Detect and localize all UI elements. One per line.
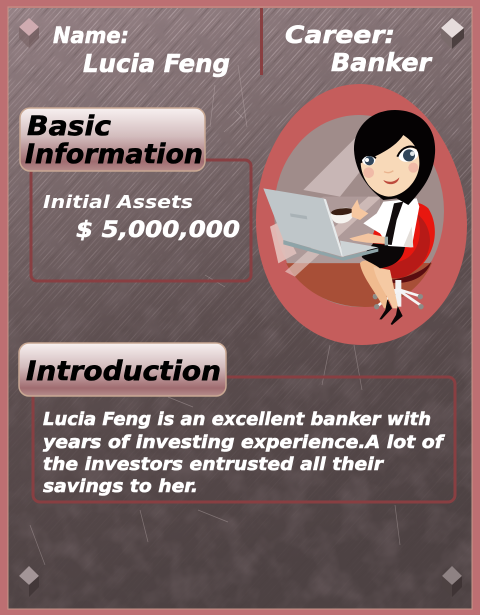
coffee cup xyxy=(331,208,355,223)
illustration: banker in egg frame xyxy=(256,84,467,345)
oval floor xyxy=(286,263,432,307)
name value: Lucia Feng xyxy=(83,49,230,78)
hand with cup xyxy=(352,199,368,220)
label: introduction: Introduction xyxy=(26,356,221,387)
cheeks xyxy=(363,167,374,178)
label: basic information: Basic xyxy=(27,111,111,142)
skirt xyxy=(362,243,405,268)
label: basic information: Information xyxy=(25,139,203,170)
egg frame xyxy=(256,84,467,345)
lower arm and hand xyxy=(349,233,387,244)
text: biography: savings to her. xyxy=(43,476,198,497)
light beams xyxy=(303,137,380,197)
label: introduction xyxy=(19,343,226,396)
tie xyxy=(383,202,403,245)
panel: basic information xyxy=(20,108,251,281)
panel outline xyxy=(33,377,455,502)
text: biography: years of investing experience.A lot of xyxy=(43,432,445,453)
face xyxy=(361,135,419,197)
text: asset value: $ 5,000,000 xyxy=(76,218,240,243)
panel outline xyxy=(31,160,251,281)
corner stud: top left xyxy=(19,18,39,48)
nose xyxy=(384,171,393,173)
name label: Name: xyxy=(53,24,129,49)
laptop screen xyxy=(263,188,342,257)
corner stud: top right xyxy=(441,18,464,49)
text: biography: Lucia Feng is an excellent banker with xyxy=(43,409,431,430)
hair xyxy=(354,110,435,205)
chair xyxy=(372,202,435,309)
label: basic information xyxy=(20,108,205,171)
panel: introduction xyxy=(19,343,455,502)
corner stud: bottom left xyxy=(19,566,39,597)
inner oval backdrop xyxy=(274,115,444,307)
text: biography xyxy=(43,409,445,497)
career value: Banker xyxy=(331,48,433,77)
career label: Career: xyxy=(285,21,395,49)
shoes xyxy=(379,299,392,319)
career heading xyxy=(285,21,433,77)
mouth xyxy=(383,177,399,184)
corner stud: bottom right xyxy=(442,566,462,597)
header divider xyxy=(260,8,263,75)
blouse xyxy=(363,198,419,247)
text: initial assets: Initial Assets xyxy=(43,192,193,213)
legs xyxy=(360,261,389,308)
eyes xyxy=(362,155,375,165)
text: biography: the investors entrusted all their xyxy=(43,454,384,475)
name heading xyxy=(53,24,230,78)
laptop base xyxy=(283,240,378,261)
